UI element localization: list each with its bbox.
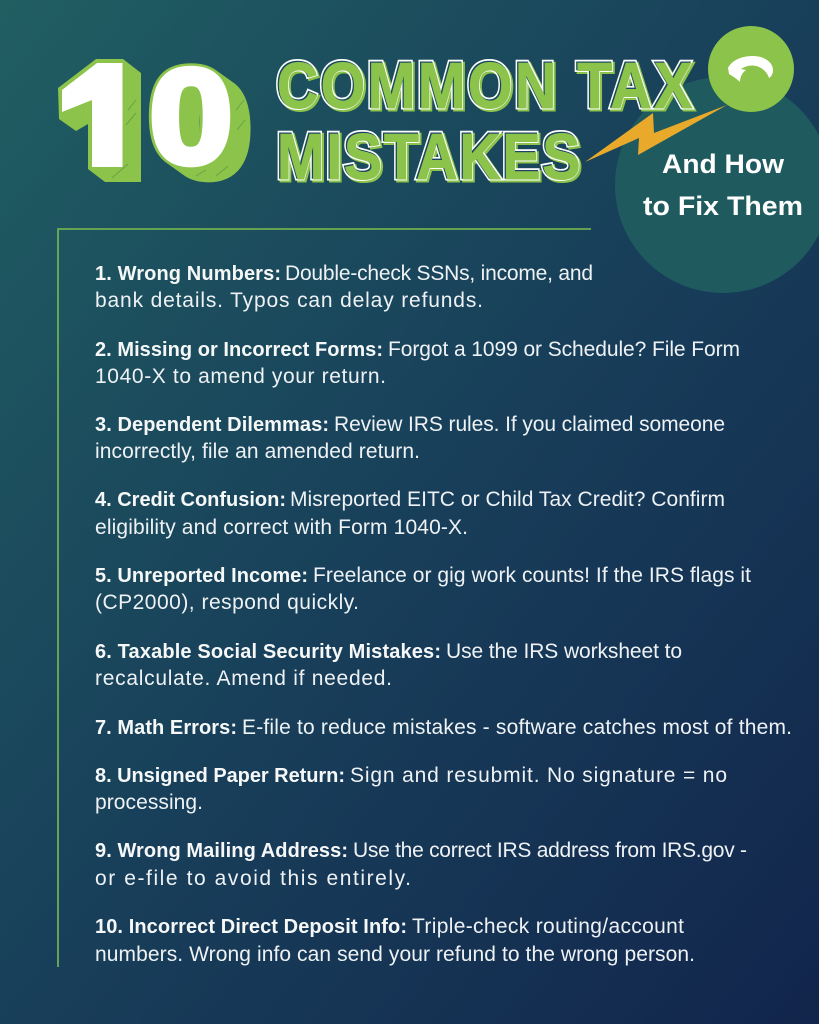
item 9: or e-file to avoid this entirely. — [95, 867, 411, 890]
item 8: processing. — [95, 791, 203, 814]
title — [276, 49, 694, 194]
item 10: 10. Incorrect Direct Deposit Info: — [95, 916, 407, 938]
item 1: 1. Wrong Numbers: — [95, 263, 281, 285]
item 4 — [95, 488, 725, 539]
item 1 — [95, 262, 593, 312]
digit 1: 1 — [56, 41, 146, 192]
green badge — [708, 26, 794, 112]
item 1: bank details. Typos can delay refunds. — [95, 289, 483, 312]
item 2: Forgot a 1099 or Schedule? File Form — [388, 338, 740, 361]
item 10: Triple-check routing/account — [412, 915, 684, 938]
frame lines — [58, 229, 591, 967]
title line: common tax: COMMON TAX — [278, 51, 694, 123]
item 3: Review IRS rules. If you claimed someone — [334, 413, 725, 436]
digit 0: 0 — [166, 54, 251, 205]
item 4: eligibility and correct with Form 1040-X. — [95, 516, 468, 539]
item 5: (CP2000), respond quickly. — [95, 591, 359, 614]
icon: swoosh — [728, 56, 773, 82]
digit 0: 0 — [152, 44, 237, 195]
item 8 — [95, 764, 727, 814]
subtitle: And How — [662, 149, 785, 179]
item 4: Misreported EITC or Child Tax Credit? Confirm — [290, 488, 725, 511]
item 2 — [95, 338, 740, 388]
digit 1: 1 — [56, 41, 146, 192]
big number 10 — [58, 59, 250, 182]
item 10: numbers. Wrong info can send your refund to the wrong person. — [95, 943, 695, 966]
digit 0: 0 — [156, 46, 240, 197]
item 9 — [95, 839, 747, 890]
item 7: 7. Math Errors: — [95, 717, 237, 739]
title line: mistakes: MISTAKES — [278, 122, 582, 194]
item 6: Use the IRS worksheet to — [446, 640, 682, 663]
title line: common tax: COMMON TAX — [276, 49, 692, 121]
item 1: Double-check SSNs, income, and — [285, 262, 593, 285]
item 8: 8. Unsigned Paper Return: — [95, 765, 345, 787]
item 6 — [95, 640, 682, 690]
lightning bolt — [585, 105, 727, 162]
subtitle — [643, 149, 803, 221]
teal circle — [615, 77, 819, 293]
item 9: Use the correct IRS address from IRS.gov - — [353, 839, 747, 862]
title line: mistakes: MISTAKES — [277, 121, 581, 193]
item 6: 6. Taxable Social Security Mistakes: — [95, 641, 441, 663]
title line: common tax: COMMON TAX — [277, 50, 693, 122]
item 6: recalculate. Amend if needed. — [95, 667, 392, 690]
title line: mistakes: MISTAKES — [276, 120, 580, 192]
digit 0: 0 — [149, 41, 233, 192]
digit 0: 0 — [163, 51, 247, 202]
subtitle: to Fix Them — [643, 191, 803, 221]
title line: common tax: COMMON TAX — [276, 49, 692, 121]
digit 0: 0 — [160, 49, 244, 200]
title line: mistakes: MISTAKES — [276, 120, 580, 192]
item 3: 3. Dependent Dilemmas: — [95, 414, 329, 436]
item 3: incorrectly, file an amended return. — [95, 440, 420, 463]
item 4: 4. Credit Confusion: — [95, 489, 286, 511]
item 5: 5. Unreported Income: — [95, 565, 308, 587]
item 8: Sign and resubmit. No signature = no — [350, 764, 727, 787]
item 5: Freelance or gig work counts! If the IRS flags it — [313, 564, 751, 587]
item 7: E-file to reduce mistakes - software catches most of them. — [242, 716, 792, 739]
item 10 — [95, 915, 695, 966]
item 9: 9. Wrong Mailing Address: — [95, 840, 348, 862]
item 2: 2. Missing or Incorrect Forms: — [95, 339, 383, 361]
item 5 — [95, 564, 751, 614]
digit 0: 0 — [149, 41, 233, 192]
panel: mistakes list — [95, 262, 792, 966]
item 3 — [95, 413, 725, 463]
item 2: 1040-X to amend your return. — [95, 365, 386, 388]
